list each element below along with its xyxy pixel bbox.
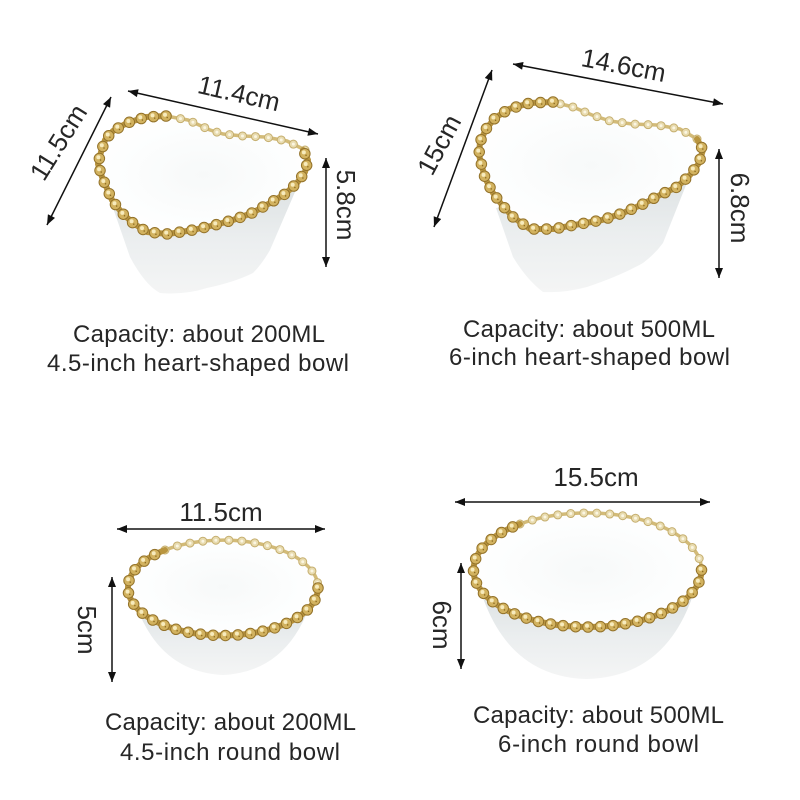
caption [105,709,356,766]
label: diameter: 11.5cm [179,497,263,527]
caption: 4.5-inch round bowl [120,739,340,766]
caption: 6-inch round bowl [498,731,699,758]
caption: Capacity: about 500ML [473,702,724,729]
arrow: width [513,64,723,104]
label: width: 11.4cm [195,69,283,117]
gold beaded rim: large round [472,513,703,628]
label: height: 6.8cm [725,173,755,243]
caption [449,316,730,371]
bowl: large round body [482,595,693,679]
arrow: length [47,97,111,225]
label: diameter: 15.5cm [553,462,639,492]
label: length: 15cm [411,110,467,180]
bowl: small heart interior [98,116,308,234]
bowl: small heart body [112,185,298,293]
caption: Capacity: about 200ML [73,321,325,348]
arrow: height [111,577,113,682]
label: length: 11.5cm [24,99,93,186]
label: height: 5cm [72,605,102,655]
bowl: small round interior [129,540,317,634]
caption [473,702,724,758]
arrow: width [128,91,318,134]
label: height: 6cm [427,600,457,650]
gold beaded rim: large heart [478,101,704,230]
panel: 6-inch round bowl [427,462,724,758]
caption: 4.5-inch heart-shaped bowl [47,350,349,377]
arrow: height [325,158,327,267]
arrow: diameter [117,528,325,530]
panel: 6-inch heart-shaped bowl [411,42,755,371]
bowl: large round interior [474,514,700,626]
gold beaded rim: small heart [97,115,309,236]
arrow: length [434,70,492,227]
arrow: height [460,563,462,669]
arrow: diameter [455,501,710,503]
bowl: large heart body [496,175,690,292]
bowl: large heart interior [479,102,703,229]
bowl: small round body [136,605,310,675]
caption: Capacity: about 200ML [105,709,356,736]
label: width: 14.6cm [579,42,668,88]
gold beaded rim: small round [127,540,319,637]
caption: 6-inch heart-shaped bowl [449,344,730,371]
panel: 4.5-inch round bowl [72,497,356,766]
label: height: 5.8cm [331,170,361,240]
arrow: height [718,149,720,278]
caption: Capacity: about 500ML [463,316,715,343]
caption [47,321,349,377]
panel: 4.5-inch heart-shaped bowl [24,69,361,377]
